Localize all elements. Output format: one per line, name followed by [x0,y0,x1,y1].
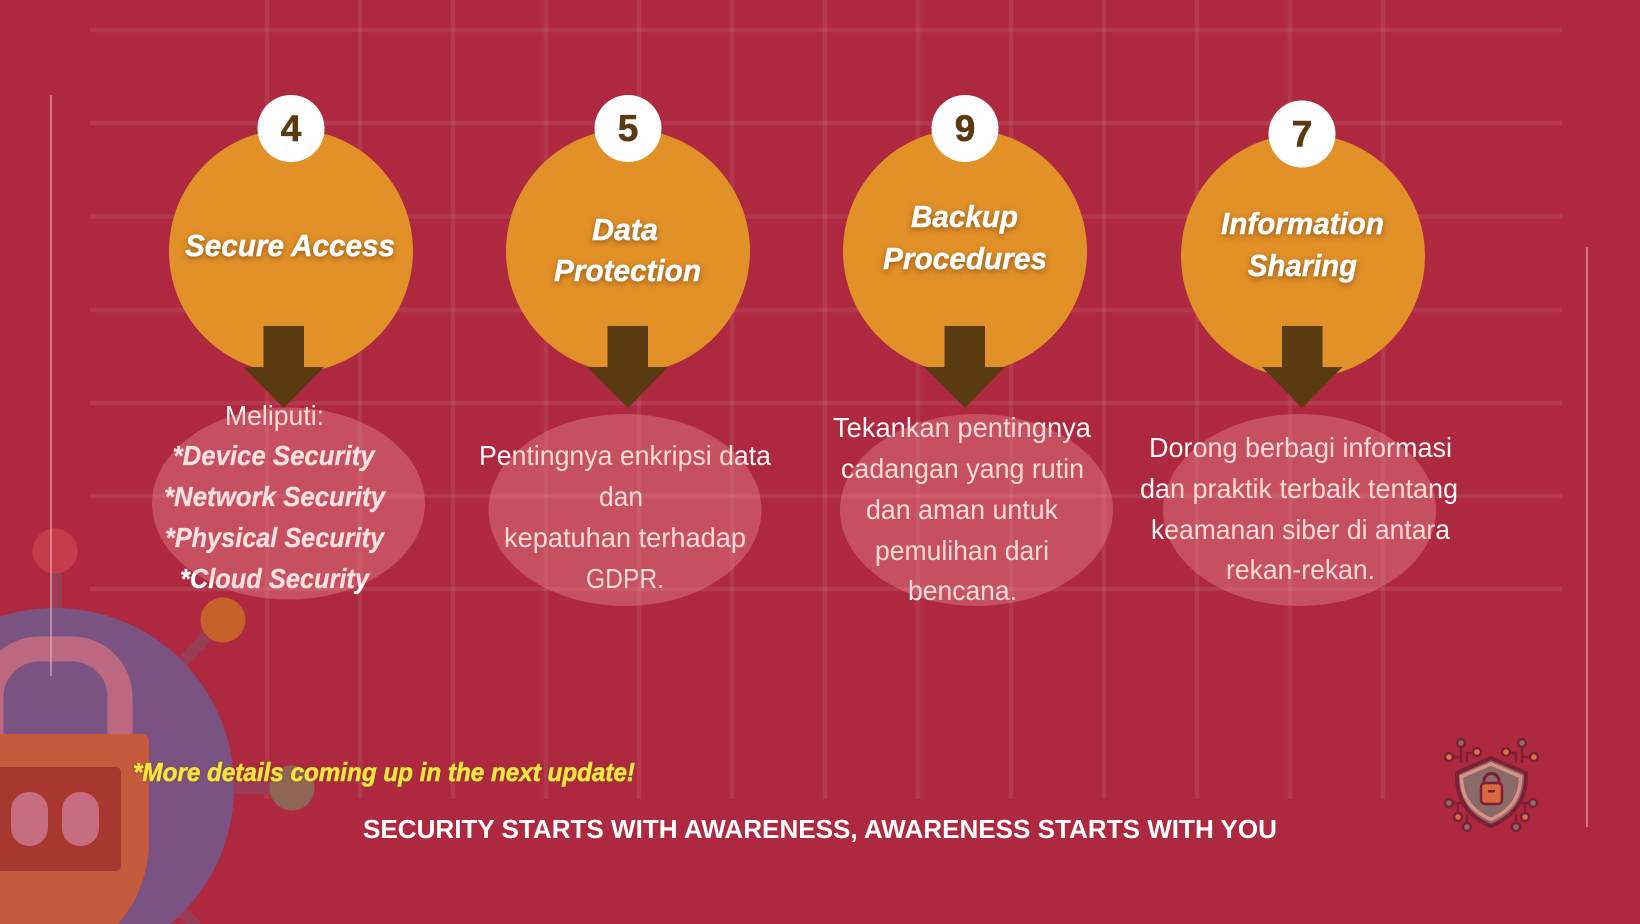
text block: *Network Security [164,481,386,512]
icon: shield with padlock and circuits [1445,739,1538,831]
badge 4: 4 [281,108,302,149]
text block: kepatuhan terhadap [504,522,746,553]
ellipse overlay [1163,414,1436,606]
text block [1140,432,1458,585]
text block: bencana. [908,575,1017,606]
arrow [587,326,668,408]
heading: Data [592,212,658,247]
text block: *Cloud Security [180,563,370,594]
badge 9 [932,95,998,162]
text block: GDPR. [586,563,664,594]
panel: secure access [152,95,425,600]
circle [506,129,750,373]
left vertical rule [50,95,52,676]
arrow [244,326,324,408]
badge 5: 5 [618,108,638,149]
heading: Secure Access [185,228,395,263]
circle [169,129,413,373]
circle [1181,134,1425,378]
text block [833,412,1091,606]
ellipse overlay [840,414,1113,606]
text block: *Physical Security [165,522,385,553]
heading: Backup [911,199,1018,234]
arrow [924,326,1005,408]
arrow [1262,326,1342,408]
illustration: padlock on network node [0,528,314,924]
panel: data protection [479,95,771,606]
right vertical rule [1586,247,1588,827]
text block: Dorong berbagi informasi [1149,432,1452,463]
panel: backup procedures [833,95,1113,606]
text block: pemulihan dari [875,535,1049,566]
slogan: SECURITY STARTS WITH AWARENESS, AWARENESS STARTS WITH YOU [363,814,1277,844]
update note: *More details coming up in the next update! [133,757,635,787]
badge 4 [258,95,324,162]
badge 7: 7 [1292,114,1312,154]
text block: keamanan siber di antara [1151,514,1450,545]
heading: Protection [554,253,701,288]
heading [883,199,1047,276]
heading: Information [1221,206,1384,241]
heading [1221,206,1384,283]
heading [554,212,701,288]
heading: Sharing [1248,248,1357,283]
ellipse overlay [488,414,762,606]
circle [843,129,1087,373]
text block: *Device Security [173,440,376,471]
badge 9: 9 [955,108,975,149]
text block: Meliputi: [225,400,324,431]
text block: dan aman untuk [866,494,1059,525]
badge 5 [594,95,662,162]
text block: Tekankan pentingnya [833,412,1091,443]
text block: cadangan yang rutin [841,453,1084,484]
text block: Pentingnya enkripsi data [479,440,771,471]
text block: dan [599,481,643,512]
ellipse overlay [152,408,425,600]
text block: rekan-rekan. [1226,554,1375,585]
text block: dan praktik terbaik tentang [1140,473,1458,504]
panel: information sharing [1140,100,1458,606]
text block [164,400,386,594]
badge 7 [1268,100,1336,168]
text block [479,440,771,594]
heading: Procedures [883,241,1047,276]
